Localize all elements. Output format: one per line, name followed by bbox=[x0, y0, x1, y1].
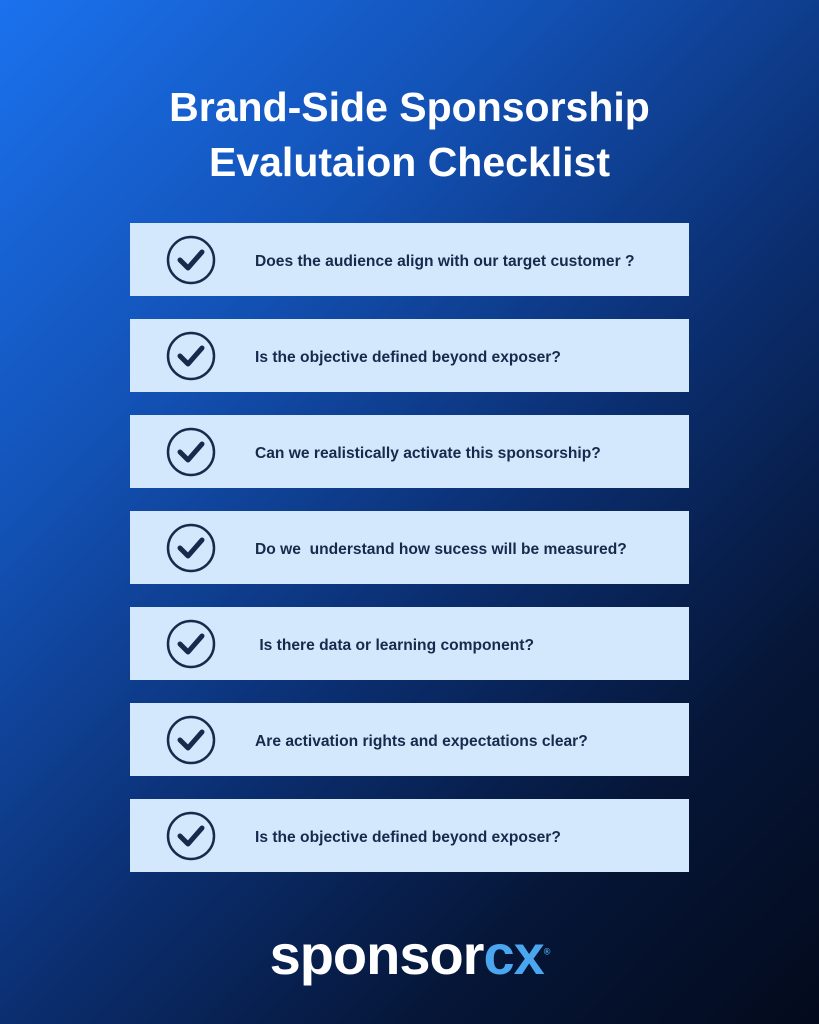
title: Brand-Side Sponsorship bbox=[169, 84, 650, 130]
title bbox=[169, 84, 650, 185]
icon: check circle bbox=[166, 428, 216, 476]
checklist item 5 bbox=[130, 607, 689, 680]
checklist item 7 bbox=[130, 799, 689, 872]
checklist item 2 bbox=[130, 319, 689, 392]
icon: check circle bbox=[166, 716, 216, 764]
icon: check circle bbox=[166, 332, 216, 380]
icon: check circle bbox=[166, 620, 216, 668]
checklist item 1: Does the audience align with our target customer ? bbox=[255, 253, 635, 270]
icon: check circle bbox=[166, 524, 216, 572]
checklist item 5: Is there data or learning component? bbox=[259, 637, 534, 654]
checklist item 7: Is the objective defined beyond exposer? bbox=[255, 829, 561, 846]
icon: check circle bbox=[166, 236, 216, 284]
checklist item 4 bbox=[130, 511, 689, 584]
checklist item 4: Do we understand how sucess will be measured? bbox=[255, 541, 627, 558]
logo: sponsorcx® bbox=[270, 923, 549, 986]
checklist item 1 bbox=[130, 223, 689, 296]
title: Evalutaion Checklist bbox=[209, 139, 610, 185]
checklist item 6 bbox=[130, 703, 689, 776]
checklist item 2: Is the objective defined beyond exposer? bbox=[255, 349, 561, 366]
checklist item 6: Are activation rights and expectations clear? bbox=[255, 733, 588, 750]
icon: check circle bbox=[166, 812, 216, 860]
checklist item 3 bbox=[130, 415, 689, 488]
checklist item 3: Can we realistically activate this sponsorship? bbox=[255, 445, 601, 462]
